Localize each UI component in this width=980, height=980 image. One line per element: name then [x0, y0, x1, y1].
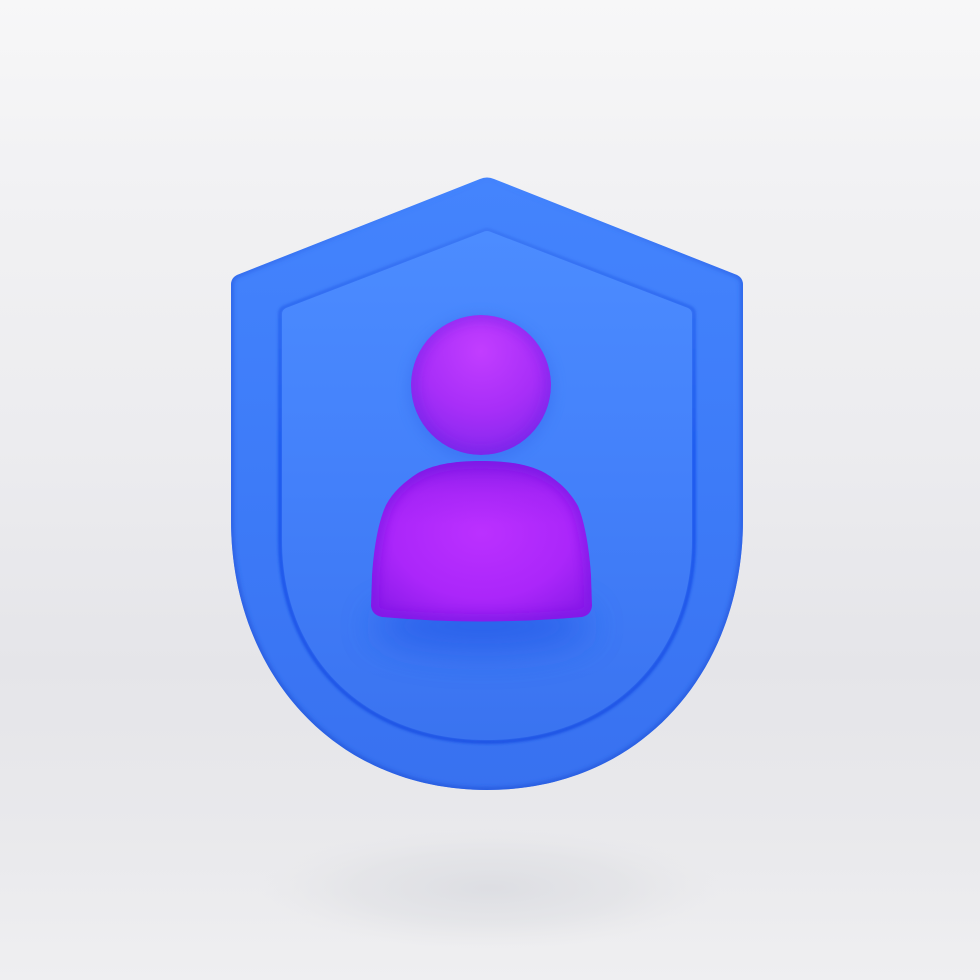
user head	[411, 315, 551, 455]
user icon	[365, 315, 597, 623]
shield inner panel	[282, 231, 692, 740]
user body	[365, 458, 597, 623]
user head shadow	[408, 315, 554, 461]
shield outer edge shading	[231, 178, 743, 790]
shield	[231, 178, 743, 790]
shield outer plate	[231, 178, 743, 790]
floor shadow	[260, 828, 720, 948]
shield inner groove	[280, 230, 694, 742]
user shadow	[374, 602, 590, 650]
